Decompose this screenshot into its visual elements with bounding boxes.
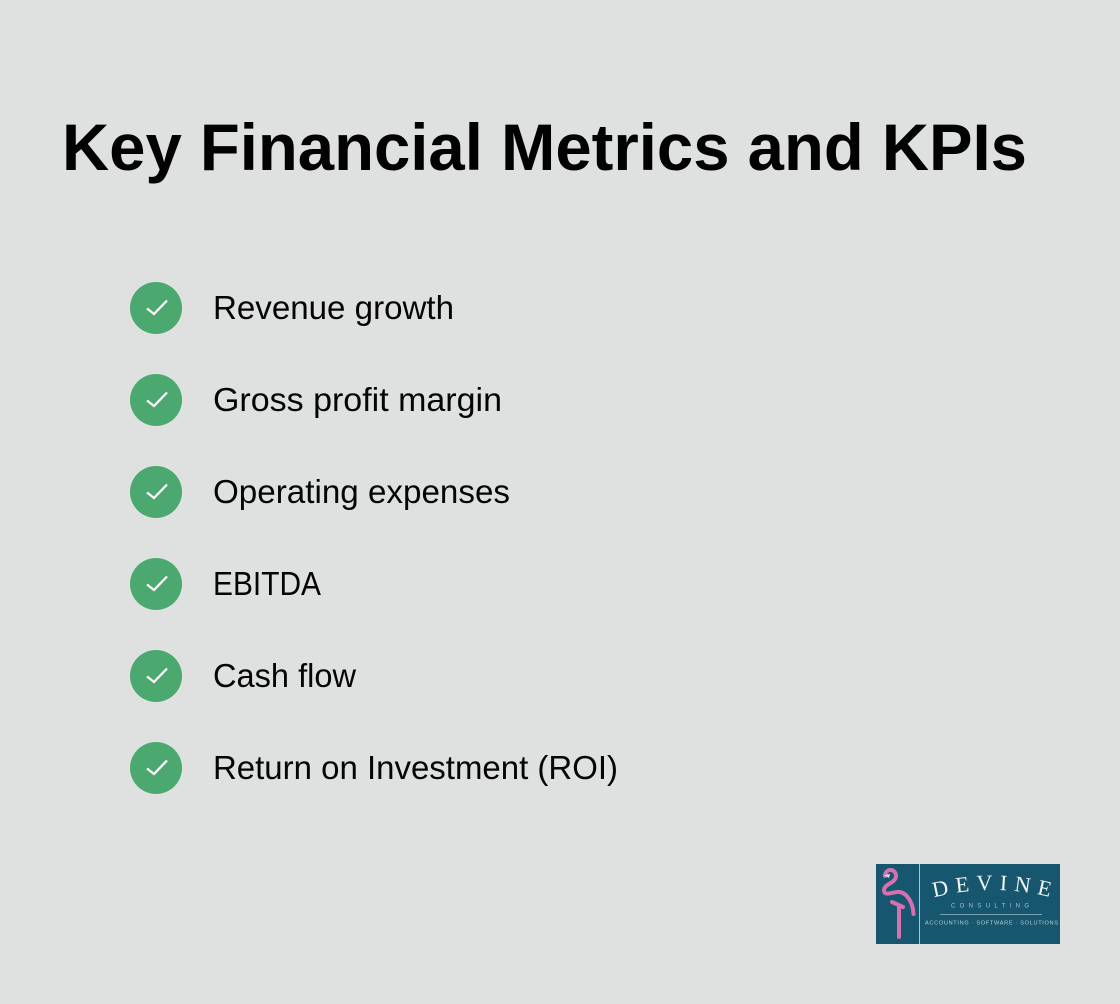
- list item: Revenue growth: [130, 282, 454, 334]
- list item: Gross profit margin: [130, 374, 502, 426]
- logo tagline: ACCOUNTING · SOFTWARE · SOLUTIONS: [925, 920, 1058, 926]
- list item: Return on Investment (ROI): [130, 742, 618, 794]
- list item: Gross profit margin: Gross profit margin: [213, 381, 502, 418]
- list item: Operating expenses: Operating expenses: [213, 473, 510, 510]
- list item: Revenue growth: Revenue growth: [213, 289, 454, 326]
- logo: Devine Consulting: [876, 864, 1060, 944]
- list item: Cash flow: [130, 650, 356, 702]
- list item: EBITDA: [130, 558, 321, 610]
- icon: flamingo: [884, 870, 914, 937]
- checklist: [130, 282, 618, 794]
- list item: Return on Investment (ROI): Return on Investment (ROI): [213, 749, 618, 786]
- list item: Operating expenses: [130, 466, 510, 518]
- list item: EBITDA: EBITDA: [213, 565, 321, 602]
- logo: Devine Consulting: DEVINE: [932, 876, 1051, 898]
- list item: Cash flow: Cash flow: [213, 657, 356, 694]
- title: Key Financial Metrics and KPIs: [62, 110, 1027, 184]
- logo subtitle: CONSULTING: [951, 904, 1029, 910]
